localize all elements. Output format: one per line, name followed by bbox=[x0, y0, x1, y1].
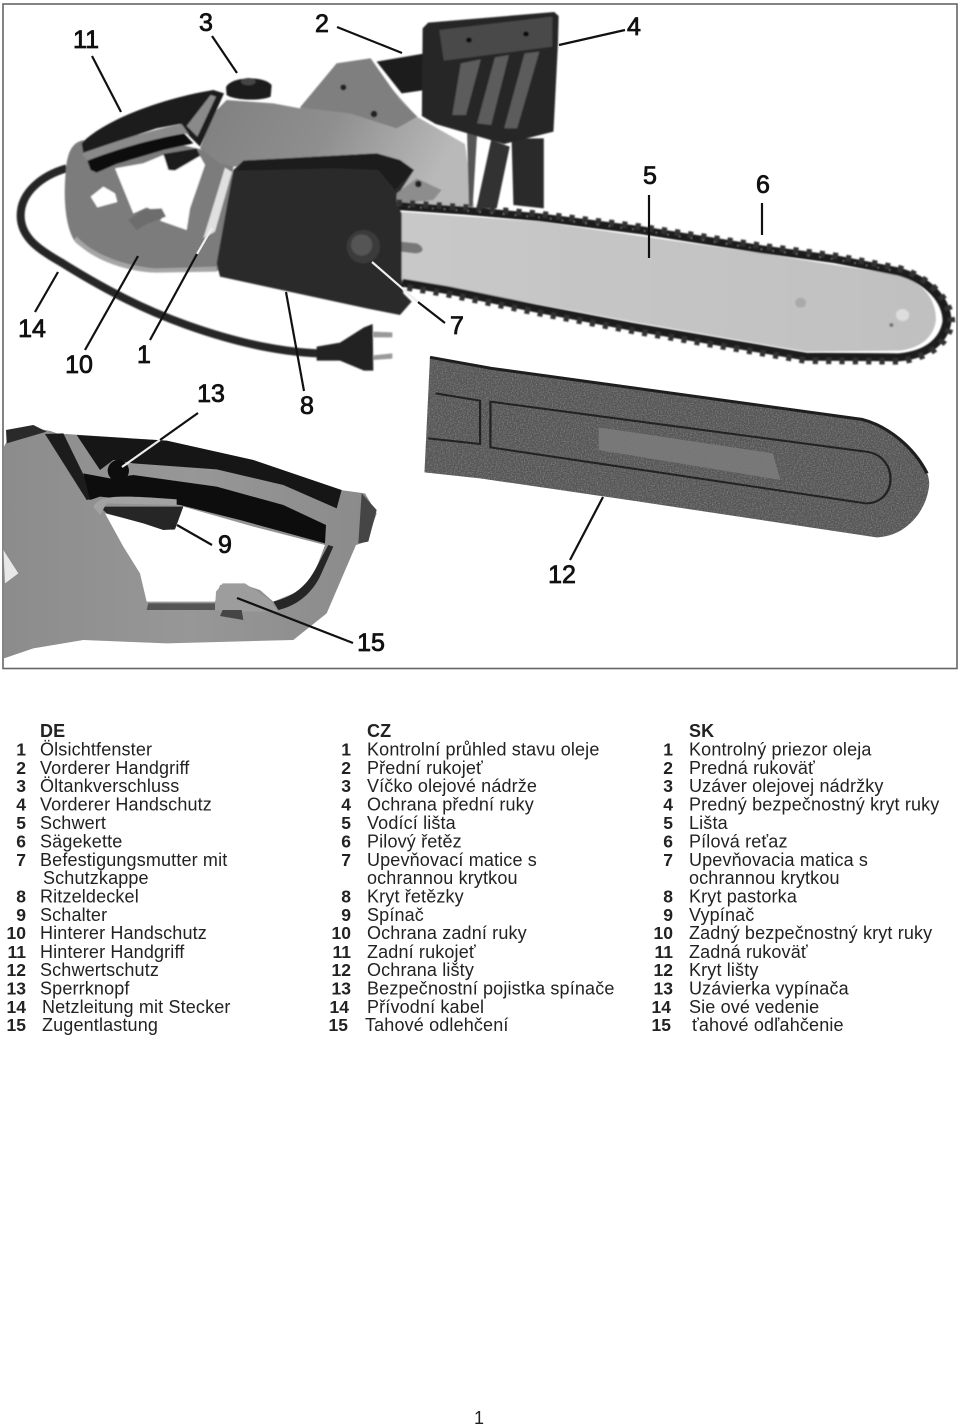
photo: rear handle close-up bbox=[3, 425, 377, 658]
rear handguard bbox=[65, 133, 233, 272]
legend column: CZ: Spínač bbox=[367, 905, 424, 925]
legend column: DE: Sperrknopf bbox=[40, 978, 130, 998]
label 6: saw chain bbox=[756, 171, 770, 235]
label 10: rear handguard bbox=[65, 256, 138, 379]
legend column: SK: 14 bbox=[652, 997, 671, 1017]
legend column: CZ: 11 bbox=[332, 942, 351, 962]
label 11: rear handle bbox=[73, 26, 121, 112]
lower black grip bbox=[83, 473, 326, 543]
saw chain bbox=[397, 206, 947, 357]
legend column: CZ: CZ bbox=[367, 721, 391, 741]
legend column: SK: 15 bbox=[652, 1015, 671, 1035]
legend column: SK: 13 bbox=[654, 978, 673, 998]
label 9: trigger bbox=[177, 525, 232, 559]
legend column: CZ: 15 bbox=[329, 1015, 348, 1035]
front handle bar bbox=[377, 53, 425, 93]
legend column: CZ: 6 bbox=[341, 831, 351, 851]
photo: chainsaw side view bbox=[21, 12, 951, 371]
guide bar bbox=[398, 212, 936, 352]
legend column: DE: 3 bbox=[16, 776, 26, 796]
legend column: SK: 6 bbox=[663, 831, 673, 851]
legend column: SK bbox=[652, 721, 939, 1035]
label 7: fixing nut bbox=[372, 262, 464, 340]
legend column: DE: Schalter bbox=[40, 905, 107, 925]
legend column: SK: Zadný bezpečnostný kryt ruky bbox=[689, 923, 932, 943]
label 14: power cord bbox=[18, 272, 58, 343]
legend column: DE: Netzleitung mit Stecker bbox=[42, 997, 231, 1017]
label 4: front handguard: 4 bbox=[627, 13, 641, 41]
legend column: CZ: 5 bbox=[341, 813, 351, 833]
label 8: sprocket cover: 8 bbox=[300, 392, 314, 420]
oil window bbox=[203, 168, 232, 238]
legend column: DE: Vorderer Handgriff bbox=[40, 758, 190, 778]
legend column: SK: 7 bbox=[663, 850, 673, 870]
legend column: DE: 11 bbox=[8, 942, 26, 962]
legend column: SK: 8 bbox=[663, 886, 673, 906]
label 3: oil tank cap bbox=[199, 9, 237, 73]
oil tank cap bbox=[226, 78, 272, 100]
label 15: strain relief bbox=[237, 598, 385, 657]
label 6: saw chain: 6 bbox=[756, 171, 770, 199]
power cord bbox=[21, 168, 318, 353]
bar clamp edge bbox=[387, 187, 402, 293]
legend column: DE: Befestigungsmutter mit bbox=[40, 850, 227, 870]
legend column: CZ: 8 bbox=[341, 886, 351, 906]
legend column: DE: Öltankverschluss bbox=[40, 776, 179, 796]
photo: bar cover bbox=[424, 357, 929, 537]
label 5: guide bar: 5 bbox=[643, 162, 657, 190]
legend column: DE: Vorderer Handschutz bbox=[40, 794, 212, 814]
legend column: DE: 2 bbox=[16, 758, 26, 778]
legend column: SK: Lišta bbox=[689, 813, 729, 833]
front handguard bbox=[422, 12, 559, 144]
legend column: CZ: Zadní rukojeť bbox=[367, 942, 476, 962]
trigger bbox=[163, 148, 200, 171]
label 4: front handguard bbox=[559, 13, 641, 45]
legend column: DE: 10 bbox=[7, 923, 26, 943]
main housing bbox=[200, 58, 475, 213]
legend column: DE bbox=[7, 721, 231, 1035]
plug bbox=[317, 324, 392, 371]
legend column: SK: ochrannou krytkou bbox=[689, 868, 840, 888]
legend column: SK: Predný bezpečnostný kryt ruky bbox=[689, 794, 939, 814]
legend column: CZ: Ochrana lišty bbox=[367, 960, 474, 980]
oil / handle tubes bbox=[512, 138, 544, 208]
legend column: SK: Uzáver olejovej nádržky bbox=[689, 776, 884, 796]
handle opening bbox=[105, 507, 325, 602]
front cap of handle bbox=[358, 493, 377, 543]
label 10: rear handguard: 10 bbox=[65, 351, 93, 379]
legend column: SK: Vypínač bbox=[689, 905, 754, 925]
legend column: SK: 12 bbox=[654, 960, 673, 980]
label 11: rear handle: 11 bbox=[73, 26, 99, 54]
legend column: CZ: 12 bbox=[332, 960, 351, 980]
legend column: CZ: Pilový řetěz bbox=[367, 831, 462, 851]
legend column: SK: 1 bbox=[663, 739, 673, 759]
legend column: DE: Ölsichtfenster bbox=[40, 739, 152, 759]
legend column: DE: Hinterer Handschutz bbox=[40, 923, 207, 943]
legend column: SK: Pílová reťaz bbox=[689, 831, 788, 851]
legend column: CZ: Upevňovací matice s bbox=[367, 850, 537, 870]
legend column: CZ: Kryt řetězky bbox=[367, 886, 464, 906]
legend column: DE: 9 bbox=[16, 905, 26, 925]
label 5: guide bar bbox=[643, 162, 657, 258]
legend column: SK: 4 bbox=[663, 794, 673, 814]
legend column: CZ: 7 bbox=[341, 850, 351, 870]
label 7: fixing nut: 7 bbox=[450, 312, 464, 340]
legend column: SK: 9 bbox=[663, 905, 673, 925]
lever bbox=[128, 208, 166, 230]
legend column: CZ: 9 bbox=[341, 905, 351, 925]
legend column: DE: Hinterer Handgriff bbox=[40, 942, 185, 962]
legend column: DE: 12 bbox=[7, 960, 26, 980]
label 8: sprocket cover bbox=[286, 292, 314, 420]
legend column: CZ: Vodící lišta bbox=[367, 813, 457, 833]
sprocket cover bbox=[217, 153, 442, 315]
rear grip bbox=[82, 90, 224, 153]
label 12: bar cover: 12 bbox=[548, 561, 576, 589]
lock button bbox=[108, 460, 129, 481]
legend column: CZ: Ochrana zadní ruky bbox=[367, 923, 527, 943]
legend column: CZ: 4 bbox=[341, 794, 351, 814]
label 9: trigger: 9 bbox=[218, 531, 232, 559]
legend column: DE: Schutzkappe bbox=[43, 868, 149, 888]
legend column: DE: Zugentlastung bbox=[42, 1015, 158, 1035]
legend column: DE: DE bbox=[40, 721, 65, 741]
legend column: DE: 15 bbox=[7, 1015, 26, 1035]
legend column: CZ: Přívodní kabel bbox=[367, 997, 484, 1017]
strain relief bbox=[215, 583, 278, 612]
trigger bbox=[100, 507, 183, 530]
legend column: SK: 11 bbox=[654, 942, 673, 962]
legend column: CZ: Přední rukojeť bbox=[367, 758, 483, 778]
legend column: SK: Kontrolný priezor oleja bbox=[689, 739, 872, 759]
legend column: CZ: 14 bbox=[330, 997, 349, 1017]
legend column: SK: Kryt lišty bbox=[689, 960, 759, 980]
legend column: CZ: Bezpečnostní pojistka spínače bbox=[367, 978, 614, 998]
label 13: lock button: 13 bbox=[197, 380, 225, 408]
legend column: CZ: ochrannou krytkou bbox=[367, 868, 518, 888]
legend column: SK: ťahové odľahčenie bbox=[692, 1015, 844, 1035]
legend column: SK: 3 bbox=[663, 776, 673, 796]
legend column: DE: Ritzeldeckel bbox=[40, 886, 139, 906]
label 1: oil window: 1 bbox=[137, 341, 151, 369]
label 1: oil window bbox=[137, 228, 212, 369]
legend column: DE: Schwertschutz bbox=[40, 960, 159, 980]
legend column: SK: Predná rukoväť bbox=[689, 758, 815, 778]
legend column: DE: 5 bbox=[16, 813, 26, 833]
label 13: lock button bbox=[122, 380, 225, 467]
legend column: CZ: 1 bbox=[341, 739, 351, 759]
legend column: DE: 4 bbox=[16, 794, 26, 814]
legend column: CZ: 10 bbox=[332, 923, 351, 943]
legend column: SK: Upevňovacia matica s bbox=[689, 850, 868, 870]
legend column: CZ: 3 bbox=[341, 776, 351, 796]
legend column: CZ: Víčko olejové nádrže bbox=[367, 776, 537, 796]
legend column: DE: 13 bbox=[7, 978, 26, 998]
legend column: DE: 7 bbox=[16, 850, 26, 870]
legend column: DE: 8 bbox=[16, 886, 26, 906]
label 2: front handle: 2 bbox=[315, 10, 329, 38]
legend column: DE: Schwert bbox=[40, 813, 106, 833]
panel: photo frame bbox=[3, 4, 957, 668]
legend column: SK: SK bbox=[689, 721, 714, 741]
legend column: CZ: 2 bbox=[341, 758, 351, 778]
fixing nut bbox=[347, 230, 380, 263]
label 12: bar cover bbox=[548, 497, 603, 589]
label 2: front handle bbox=[315, 10, 402, 53]
legend column: CZ: 13 bbox=[332, 978, 351, 998]
legend column: CZ: Kontrolní průhled stavu oleje bbox=[367, 739, 600, 759]
legend column: CZ: Tahové odlehčení bbox=[365, 1015, 509, 1035]
legend column: DE: 6 bbox=[16, 831, 26, 851]
legend column: SK: Uzávierka vypínača bbox=[689, 978, 850, 998]
legend column: SK: Zadná rukoväť bbox=[689, 942, 808, 962]
label 14: power cord: 14 bbox=[18, 315, 46, 343]
legend column: DE: Sägekette bbox=[40, 831, 122, 851]
upper black grip bbox=[77, 435, 342, 508]
legend column: DE: 1 bbox=[16, 739, 26, 759]
legend column: DE: 14 bbox=[7, 997, 26, 1017]
legend column: CZ bbox=[329, 721, 614, 1035]
label 3: oil tank cap: 3 bbox=[199, 9, 213, 37]
legend column: SK: 10 bbox=[654, 923, 673, 943]
handle opening bbox=[115, 155, 205, 230]
legend column: SK: 2 bbox=[663, 758, 673, 778]
legend column: SK: Kryt pastorka bbox=[689, 886, 798, 906]
legend column: SK: Sie ové vedenie bbox=[689, 997, 819, 1017]
legend column: SK: 5 bbox=[663, 813, 673, 833]
legend column: CZ: Ochrana přední ruky bbox=[367, 794, 534, 814]
label 15: strain relief: 15 bbox=[357, 629, 385, 657]
